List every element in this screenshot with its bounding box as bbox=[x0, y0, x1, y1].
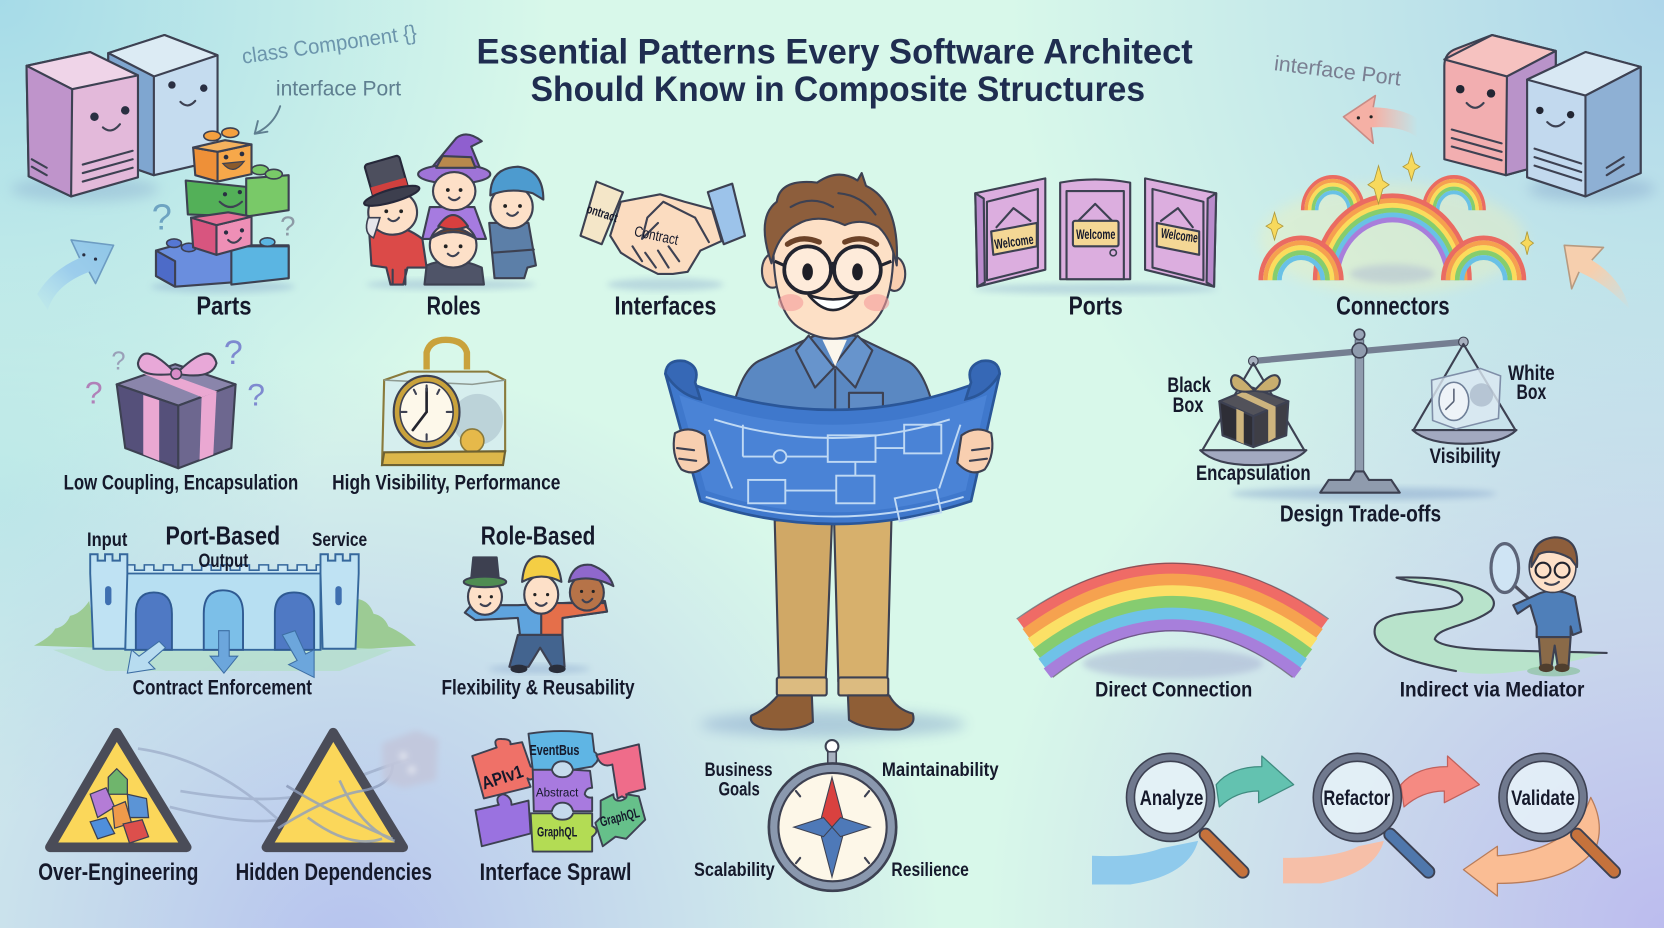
icon: parts lego stack: ? bbox=[280, 211, 296, 242]
label: maintainability: Maintainability bbox=[882, 760, 999, 781]
door two: Welcome bbox=[1076, 227, 1116, 242]
label: black box bbox=[1167, 374, 1211, 417]
icon: handshake interfaces bbox=[580, 182, 745, 291]
icon: direct connection rainbow bbox=[1017, 563, 1329, 678]
label: service: Service bbox=[312, 530, 367, 551]
magnifier: validate: Validate bbox=[1511, 787, 1575, 810]
magnifier: refactor: Refactor bbox=[1323, 787, 1390, 810]
label: design trade-offs: Design Trade-offs bbox=[1280, 500, 1441, 526]
hands bbox=[674, 429, 992, 472]
icon: parts lego stack bbox=[151, 128, 296, 293]
arrow: red forward bbox=[1401, 756, 1479, 807]
icon: mystery gift black box: ? bbox=[224, 334, 243, 372]
label: business goals: Goals bbox=[718, 779, 760, 800]
icon: handshake interfaces: Contract bbox=[633, 224, 680, 249]
door three: Welcome bbox=[1160, 226, 1199, 246]
arrow: salmon swoosh bbox=[1283, 841, 1384, 883]
label: connectors: Connectors bbox=[1336, 292, 1450, 320]
heading: role-based: Role-Based bbox=[481, 523, 595, 551]
label: input: Input bbox=[87, 530, 128, 551]
blueprint bbox=[665, 361, 1000, 524]
label: scalability: Scalability bbox=[694, 860, 775, 881]
label: low coupling: Low Coupling, Encapsulation bbox=[64, 471, 298, 494]
black gift bbox=[1219, 375, 1288, 447]
icon: tangled wires bbox=[138, 749, 409, 845]
icon: analyze refactor validate cycle bbox=[1092, 753, 1614, 896]
arrow: pointer to lego bbox=[255, 106, 280, 134]
heading: port-based: Port-Based bbox=[166, 523, 280, 551]
label: black box: Box bbox=[1173, 394, 1204, 417]
text: interface port left: interface Port bbox=[276, 78, 401, 101]
magnifier: refactor bbox=[1313, 753, 1428, 872]
icon: curved peach arrow bbox=[1564, 245, 1630, 310]
door two bbox=[1060, 179, 1130, 279]
arrow: orange return bbox=[1463, 797, 1599, 896]
shirt bbox=[727, 336, 939, 499]
label: resilience: Resilience bbox=[891, 860, 969, 881]
icon: parts lego stack: ? bbox=[152, 196, 172, 237]
icon: puzzle pieces bbox=[472, 731, 645, 852]
icon: warning triangle hidden dependencies bbox=[266, 733, 403, 847]
icon: curved blue arrow bbox=[37, 240, 114, 310]
arrow: teal forward bbox=[1216, 756, 1294, 807]
label: business goals: Business bbox=[705, 760, 773, 781]
clear box bbox=[1432, 368, 1501, 429]
icon: connectors rainbows bbox=[1260, 153, 1533, 294]
magnifier: analyze: Analyze bbox=[1140, 787, 1204, 810]
icon: puzzle pieces: EventBus bbox=[530, 743, 579, 759]
icon: mystery gift black box bbox=[85, 334, 265, 468]
icon: puzzle pieces: GraphQL bbox=[537, 825, 577, 840]
icon: ports doors bbox=[973, 178, 1217, 294]
door one bbox=[975, 178, 1045, 287]
label: flexibility and reusability: Flexibility & Reusability bbox=[441, 676, 635, 699]
text: class component: class Component {} bbox=[241, 21, 418, 69]
icon: compass bbox=[769, 740, 896, 891]
door one: Welcome bbox=[993, 232, 1035, 252]
icon: many hats figure bbox=[464, 556, 613, 673]
label: high visibility: High Visibility, Performance bbox=[332, 471, 560, 494]
icon: handshake interfaces: ontract bbox=[585, 201, 620, 225]
text: interface port right: interface Port bbox=[1273, 52, 1402, 91]
label: white box: Box bbox=[1516, 381, 1546, 404]
icon: curved pink arrow bbox=[1344, 96, 1418, 143]
legs and trousers bbox=[751, 520, 914, 730]
label: white box bbox=[1508, 362, 1555, 404]
label: output: Output bbox=[198, 551, 249, 572]
label: interface sprawl: Interface Sprawl bbox=[480, 859, 631, 886]
icon: puzzle pieces: GraphQL bbox=[598, 805, 641, 829]
icon: mystery gift black box: ? bbox=[85, 374, 103, 410]
icon: friendly servers left bbox=[11, 35, 218, 202]
icon: blurred cube bbox=[382, 731, 438, 788]
label: roles: Roles bbox=[427, 292, 481, 320]
icon: port-based castle bbox=[34, 554, 416, 677]
magnifier: analyze bbox=[1126, 753, 1243, 872]
label: visibility: Visibility bbox=[1429, 445, 1501, 468]
label: encapsulation: Encapsulation bbox=[1196, 462, 1311, 485]
label: direct connection: Direct Connection bbox=[1095, 679, 1252, 702]
icon: balance scale bbox=[1200, 329, 1516, 500]
title: Should Know in Composite Structures bbox=[531, 70, 1145, 109]
icon: friendly servers right bbox=[1444, 35, 1656, 202]
head bbox=[762, 173, 905, 339]
title: Essential Patterns Every Software Architect bbox=[476, 33, 1193, 72]
door three bbox=[1145, 178, 1216, 287]
label: ports: Ports bbox=[1069, 292, 1123, 320]
icon: mystery gift black box: ? bbox=[111, 347, 126, 376]
icon: roles characters bbox=[354, 134, 543, 290]
icon: warning triangle over-engineering bbox=[50, 733, 187, 847]
label: parts: Parts bbox=[196, 292, 252, 320]
label: hidden dependencies: Hidden Dependencies bbox=[236, 859, 432, 886]
icon: puzzle pieces: APIv1 bbox=[479, 761, 526, 793]
icon: puzzle pieces: Abstract bbox=[536, 786, 579, 799]
icon: winding path with mini architect bbox=[1375, 537, 1607, 676]
icon: mystery gift black box: ? bbox=[247, 377, 265, 413]
label: interfaces: Interfaces bbox=[614, 292, 716, 320]
label: over-engineering: Over-Engineering bbox=[38, 859, 198, 886]
icon: clock in glass box bbox=[382, 340, 505, 465]
label: indirect via mediator: Indirect via Mediator bbox=[1400, 679, 1584, 702]
title bbox=[476, 33, 1193, 109]
label: black box: Black bbox=[1167, 374, 1211, 397]
label: contract enforcement: Contract Enforcement bbox=[133, 676, 312, 699]
arrow: blue swoosh bbox=[1092, 841, 1198, 884]
central figure: architect holding blueprint bbox=[665, 173, 1000, 738]
label: white box: White bbox=[1508, 362, 1555, 385]
label: business goals bbox=[705, 760, 773, 800]
magnifier: validate bbox=[1499, 753, 1614, 872]
